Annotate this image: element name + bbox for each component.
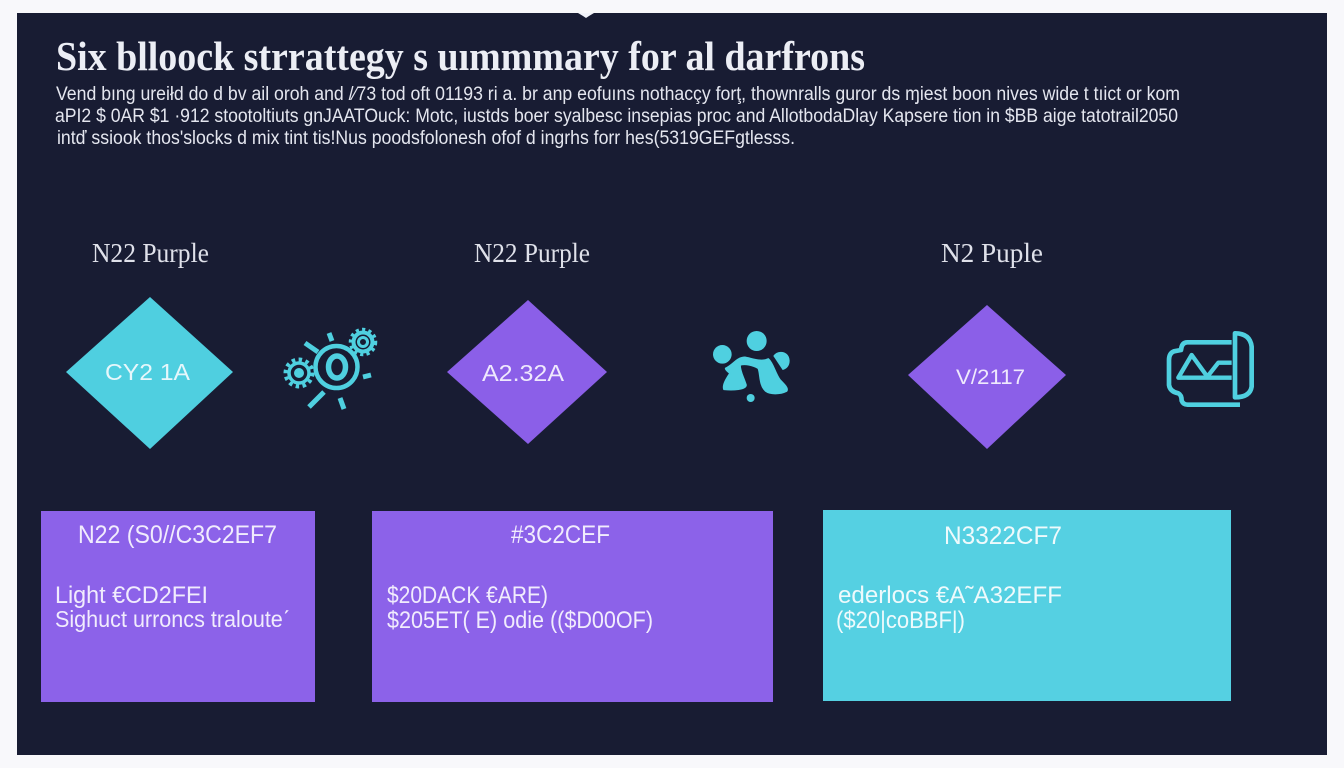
panel: cyan right bbox=[823, 510, 1231, 701]
panel: cyan right: ($20|coBBF|) bbox=[836, 607, 965, 634]
panel: cyan right: ederlocs €A˜A32EFF bbox=[838, 582, 1062, 609]
icon: chart card bbox=[1169, 333, 1252, 405]
diamond: purple right: V/2117 bbox=[956, 366, 1025, 389]
intro text: aPI2 $ 0AR $1 ·912 stootoltiuts gnJAATOuck: Motc, iustds boer syalbesc insepias proc and AllotbodaDlay Kapsere tion in $BB aige tatotrail2050 bbox=[55, 106, 1178, 127]
intro text: Vend bıng ureiłd do d bv ail oroh and /⁄73 tod oft 01193 ri a. br anp eofuıns nothacçy forţ, thownralls guror ds ɱiest boon nives wide t tıict or kom bbox=[56, 84, 1180, 105]
panel: purple left bbox=[41, 511, 315, 702]
icon: gears bbox=[286, 330, 376, 409]
intro text bbox=[55, 84, 1180, 149]
header block bbox=[55, 33, 1180, 149]
panel: cyan right: N3322CF7 bbox=[944, 522, 1062, 550]
diamond: purple center bbox=[447, 300, 607, 444]
diamond: cyan bbox=[66, 297, 233, 449]
column 2 label: N22 Purple bbox=[474, 238, 590, 268]
title: Six blloock strrattegy s uımmmary for al darfrons bbox=[56, 33, 865, 79]
panel: purple left: Light €CD2FEI bbox=[55, 582, 208, 609]
column 3 label: N2 Puple bbox=[941, 238, 1043, 268]
panel: purple center: #3C2CEF bbox=[511, 521, 610, 549]
panel: purple center: $20DACK €ARE) bbox=[387, 582, 548, 609]
diamond: purple right bbox=[908, 305, 1066, 449]
diamond: cyan: CY2 1A bbox=[105, 359, 191, 385]
panel: purple center bbox=[372, 511, 773, 702]
panel: purple left: Sighuct urroncs tralouteˊ bbox=[55, 606, 290, 632]
intro text: intď ssiook thos'slocks d mix tint tis!Nus poodsfolonesh ofof d ingrhs forr hes(5319GEFgtlesss. bbox=[57, 128, 795, 149]
diamond: purple center: A2.32A bbox=[482, 360, 565, 386]
top edge notch bbox=[578, 13, 594, 18]
panel: purple left: N22 (S0//C3C2EF7 bbox=[78, 521, 277, 549]
icon: people bbox=[713, 331, 790, 402]
column 1 label: N22 Purple bbox=[92, 238, 209, 268]
panel: purple center: $205ET( E) odie (($D00OF) bbox=[387, 607, 653, 634]
